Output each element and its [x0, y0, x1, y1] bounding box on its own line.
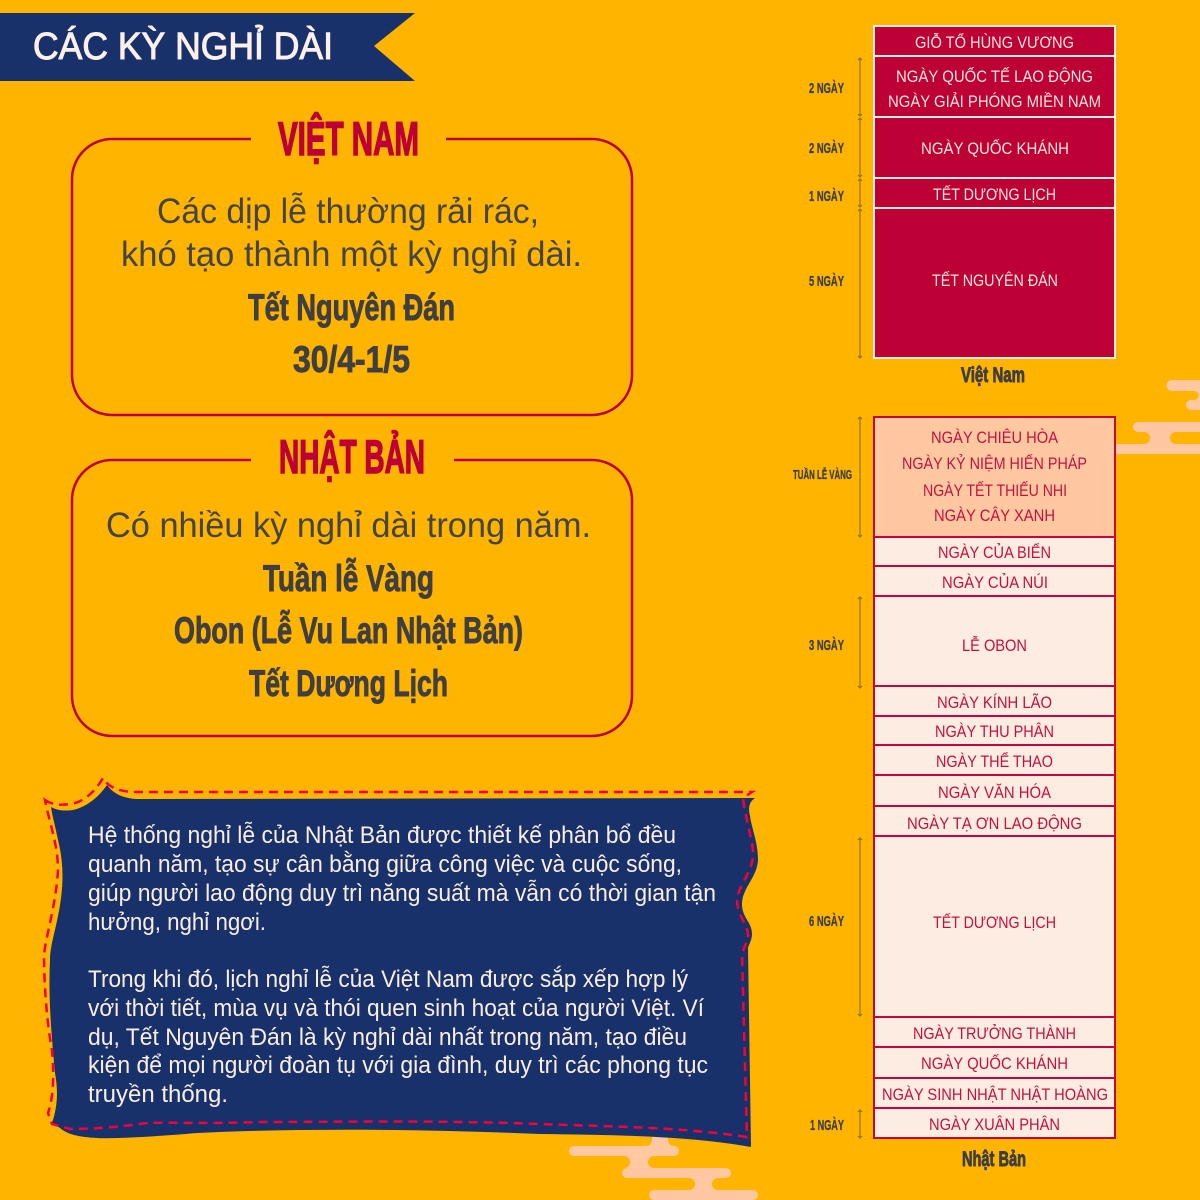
title: CÁC KỲ NGHỈ DÀI — [33, 24, 333, 68]
chart: Nhật Bản holidays: NGÀY TẾT THIẾU NHI — [923, 481, 1067, 500]
panel: Nhật Bản — [72, 430, 632, 736]
chart: Việt Nam holidays: NGÀY GIẢI PHÓNG MIỀN NAM — [888, 92, 1101, 111]
text block: Nhật Bản long holidays: Obon (Lễ Vu Lan Nhật Bản) — [174, 610, 523, 651]
chart: Nhật Bản holidays: TẾT DƯƠNG LỊCH — [933, 913, 1056, 932]
text block: callout paragraphs: hưởng, nghỉ ngơi. — [88, 909, 266, 936]
chart: Nhật Bản holidays: NGÀY KÍNH LÃO — [937, 693, 1052, 712]
chart: Nhật Bản holidays: NGÀY XUÂN PHÂN — [929, 1115, 1060, 1134]
text block: Việt Nam long holidays: 30/4-1/5 — [293, 339, 410, 380]
chart: Nhật Bản holidays: NGÀY TRƯỞNG THÀNH — [913, 1024, 1076, 1043]
chart: Nhật Bản holidays: NGÀY CHIÊU HÒA — [931, 428, 1059, 447]
chart: Nhật Bản holidays: NGÀY CỦA BIỂN — [938, 543, 1051, 562]
text block: Nhật Bản long holidays: Tết Dương Lịch — [249, 663, 448, 704]
chart: Nhật Bản holidays: NGÀY VĂN HÓA — [938, 783, 1052, 802]
chart: Nhật Bản holidays: NGÀY SINH NHẬT NHẬT HOÀNG — [882, 1085, 1108, 1104]
text block: callout paragraphs — [88, 822, 716, 1108]
text block: callout paragraphs: truyền thống. — [88, 1081, 228, 1108]
duration labels: Việt Nam: 5 NGÀY — [809, 273, 844, 290]
text block: Việt Nam long holidays — [248, 287, 455, 380]
text block: Việt Nam summary: Các dịp lễ thường rải rác, — [157, 192, 539, 231]
duration arrows: Nhật Bản — [858, 417, 862, 1138]
text block: callout paragraphs: với thời tiết, mùa vụ và thói quen sinh hoạt của người Việt. Ví — [88, 995, 704, 1022]
text block: callout paragraphs: quanh năm, tạo sự cân bằng giữa công việc và cuộc sống, — [88, 851, 682, 878]
text block: Việt Nam long holidays: Tết Nguyên Đán — [248, 287, 455, 328]
heading: Việt Nam: VIỆT NAM — [278, 112, 419, 165]
heading: Nhật Bản: NHẬT BẢN — [279, 430, 425, 483]
duration labels: Việt Nam: 2 NGÀY — [809, 140, 844, 157]
dashed stitching — [44, 778, 753, 1137]
text block: callout paragraphs: kiện để mọi người đoàn tụ với gia đình, duy trì các phong tục — [88, 1052, 708, 1079]
chart: Việt Nam holidays: NGÀY QUỐC TẾ LAO ĐỘNG — [896, 66, 1093, 86]
chart: Nhật Bản holidays: NGÀY CÂY XANH — [934, 506, 1055, 525]
chart: Việt Nam holidays: GIỖ TỔ HÙNG VƯƠNG — [915, 33, 1074, 52]
duration labels: Việt Nam: 1 NGÀY — [809, 188, 844, 205]
chart: Việt Nam holidays — [809, 26, 1115, 387]
panel: Việt Nam — [72, 112, 632, 415]
chart: Việt Nam holidays: NGÀY QUỐC KHÁNH — [921, 138, 1069, 158]
duration labels: Nhật Bản: 3 NGÀY — [809, 637, 844, 654]
chart: Nhật Bản holidays: NGÀY TẠ ƠN LAO ĐỘNG — [907, 814, 1082, 833]
duration labels: Nhật Bản: 6 NGÀY — [809, 913, 844, 930]
chart: Nhật Bản holidays: NGÀY THU PHÂN — [935, 722, 1054, 741]
duration labels: Nhật Bản: 1 NGÀY — [810, 1117, 844, 1134]
text block: callout paragraphs: Trong khi đó, lịch nghỉ lễ của Việt Nam được sắp xếp hợp lý — [88, 966, 688, 993]
title banner — [0, 13, 415, 81]
duration labels: Việt Nam — [809, 80, 844, 290]
duration arrows: Việt Nam — [858, 58, 862, 358]
text block: Việt Nam summary: khó tạo thành một kỳ nghỉ dài. — [121, 235, 582, 274]
callout — [44, 778, 758, 1147]
chart: Nhật Bản holidays: NGÀY KỶ NIỆM HIẾN PHÁP — [902, 454, 1087, 473]
cloud: bottom centre — [569, 1130, 758, 1200]
text block: Nhật Bản long holidays: Tuần lễ Vàng — [263, 558, 434, 599]
text block: callout paragraphs: Hệ thống nghỉ lễ của Nhật Bản được thiết kế phân bổ đều — [88, 822, 676, 849]
chart: Nhật Bản holidays: NGÀY THỂ THAO — [936, 752, 1053, 771]
text block: Nhật Bản summary: Có nhiều kỳ nghỉ dài trong năm. — [106, 506, 591, 545]
chart: Việt Nam holidays: TẾT DƯƠNG LỊCH — [933, 185, 1056, 204]
chart: Nhật Bản holidays: NGÀY QUỐC KHÁNH — [921, 1053, 1068, 1073]
text block: callout paragraphs: giúp người lao động duy trì năng suất mà vẫn có thời gian tận — [88, 880, 716, 907]
chart: Nhật Bản holidays — [793, 417, 1115, 1171]
duration labels: Nhật Bản: TUẦN LỄ VÀNG — [793, 467, 852, 482]
chart caption: Nhật Bản: Nhật Bản — [962, 1148, 1026, 1171]
text block: Việt Nam summary — [121, 192, 582, 274]
chart: Nhật Bản holidays: NGÀY CỦA NÚI — [942, 573, 1048, 592]
chart caption: Việt Nam: Việt Nam — [961, 364, 1025, 387]
text block: Nhật Bản long holidays — [174, 558, 523, 704]
text block: callout paragraphs: dụ, Tết Nguyên Đán là kỳ nghỉ dài nhất trong năm, tạo điều — [88, 1024, 687, 1051]
duration labels: Nhật Bản — [793, 467, 852, 1134]
duration labels: Việt Nam: 2 NGÀY — [809, 80, 844, 97]
chart: Nhật Bản holidays: LỄ OBON — [962, 636, 1027, 655]
cloud: top right — [1115, 380, 1200, 454]
chart: Việt Nam holidays: TẾT NGUYÊN ĐÁN — [932, 271, 1058, 290]
